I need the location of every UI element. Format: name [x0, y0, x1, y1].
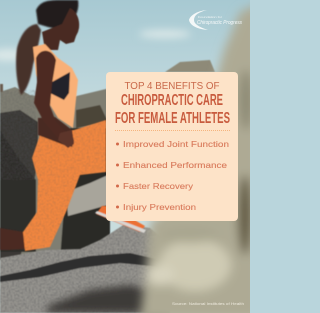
benefit 3: Faster Recovery [123, 181, 194, 191]
dotted divider [115, 130, 231, 132]
logo: Chiropractic Progress [197, 20, 242, 26]
face and neck [42, 8, 79, 50]
tank top [33, 44, 78, 128]
front thigh [23, 120, 106, 251]
arm [34, 51, 74, 147]
source note: Source: National Institutes of Health [172, 301, 244, 306]
infographic [0, 0, 250, 313]
shoe [96, 206, 145, 232]
waist skin [38, 117, 74, 145]
background rocks [0, 60, 215, 260]
sports bra [50, 72, 70, 100]
hair and ponytail [16, 0, 78, 95]
back leg skin [0, 228, 26, 250]
foreground rock [0, 225, 156, 313]
shoe sole [95, 211, 146, 233]
front thigh texture [23, 120, 106, 251]
sky background [0, 0, 250, 313]
benefit 1: Improved Joint Function [123, 139, 229, 149]
athlete [0, 0, 146, 251]
logo: Foundation for [198, 15, 222, 19]
benefit 4: Injury Prevention [123, 202, 196, 212]
hand [58, 130, 74, 148]
panel [106, 72, 238, 221]
heading line 1: TOP 4 BENEFITS OF [124, 81, 220, 92]
blurred foreground rock [140, 5, 260, 313]
logo [189, 10, 242, 30]
benefit 2: Enhanced Performance [123, 160, 227, 170]
clouds [0, 30, 191, 61]
